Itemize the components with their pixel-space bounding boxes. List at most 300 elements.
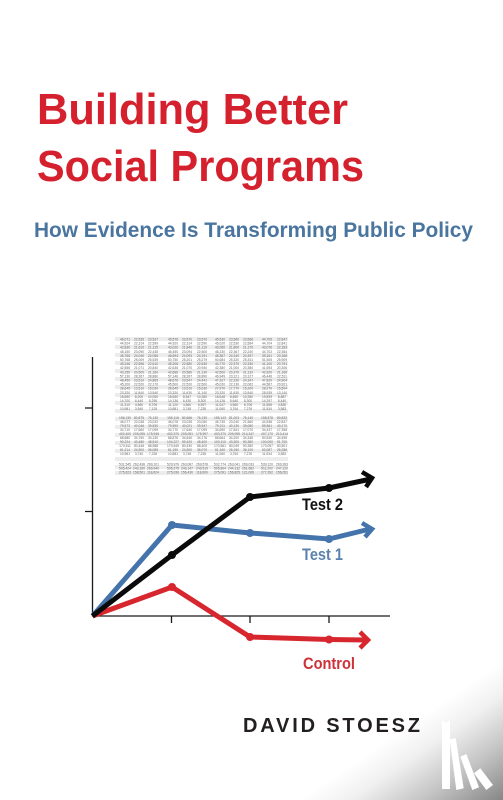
title: Building Better [37,85,348,134]
data table: 79,211 [215,424,225,428]
data table: 263,087 [181,462,193,466]
data table: 48,387 [215,354,225,358]
data table: 20,840 [148,366,158,370]
data table: 11,630 [229,391,239,395]
data table: 11,120 [168,403,178,407]
data table: 22,370 [229,362,239,366]
data table: 3,745 [183,452,191,456]
data table: 36,070 [197,448,207,452]
title [37,85,364,191]
data table: 39,080 [243,424,253,428]
data table: 28,645 [120,387,130,391]
data table: 81,003 [229,416,239,420]
data table: 25,201 [182,358,192,362]
data table: 22,354 [277,350,287,354]
data table: 23,570 [182,338,192,342]
data table: 24,347 [243,378,253,382]
data table: 22,599 [148,342,158,346]
data table: 23,032 [148,420,158,424]
data table: 45,020 [215,342,225,346]
data table: 15,200 [243,387,253,391]
data table: 214,347 [242,432,254,436]
data table: 46,077 [120,420,130,424]
data table: 22,183 [277,346,287,350]
data table: 210,414 [276,432,288,436]
data table: 243,147 [181,466,193,470]
data table: 21,170 [243,346,253,350]
data table: 11,840 [134,391,144,395]
data table: 61,214 [120,448,130,452]
data table: 21,132 [243,370,253,374]
data table: 46,071 [120,338,130,342]
data table: 22,841 [277,342,287,346]
data table: 34,690 [215,428,225,432]
data table: 22,847 [277,420,287,424]
data table: 48,510 [148,440,158,444]
data table: 23,094 [182,350,192,354]
data table: 42,380 [215,366,225,370]
data table: 24,441 [197,378,207,382]
data table: 44,770 [215,362,225,366]
data table: 23,537 [148,338,158,342]
data table: 51,700 [277,440,287,444]
data table: 80,446 [134,444,144,448]
data table: 158,501 [133,470,145,474]
data table: 25,341 [243,358,253,362]
data table: 8,300 [198,399,206,403]
data table: 22,580 [182,362,192,366]
data table: 275,036 [167,470,179,474]
data table: 24,240 [229,354,239,358]
data table: 25,539 [148,358,158,362]
data table: 531,545 [119,462,131,466]
data table: 59,561 [262,424,272,428]
data table: 90,380 [243,444,253,448]
data table: 23,090 [134,350,144,354]
data table: 22,535 [134,338,144,342]
data table: 5,640 [230,399,238,403]
data table: 22,062 [243,383,253,387]
data table: 43,076 [262,346,272,350]
data table: 22,500 [197,383,207,387]
data table: 20,306 [277,366,287,370]
data table: 23,240 [229,420,239,424]
data table: 22,038 [134,420,144,424]
data table: 532,774 [214,462,226,466]
data table: 7,235 [149,452,157,456]
data table: 80,666 [182,416,192,420]
data table: 263,041 [228,462,240,466]
data table: 50,684 [215,358,225,362]
data table: 8,547 [183,395,191,399]
data table: 18,650 [120,395,130,399]
data table: 21,000 [229,366,239,370]
data table: 100,110 [214,440,226,444]
data table: 46,949 [215,374,225,378]
data table: 45,020 [215,383,225,387]
data table: 6,597 [198,403,206,407]
data table: 14,136 [168,399,178,403]
data table: 42,556 [120,366,130,370]
data table: 15,504 [277,387,287,391]
data table: 25,009 [134,358,144,362]
data table: 42,830 [120,346,130,350]
data table: 42,500 [215,370,225,374]
data table: 80,832 [277,416,287,420]
data table: 24,056 [148,354,158,358]
data table: 170,097 [261,444,273,448]
data table: 244,132 [228,466,240,470]
data table: 63,087 [262,448,272,452]
data table: 121,006 [242,470,254,474]
data table: 90,224 [120,440,130,444]
data table: 23,320 [215,391,225,395]
data table: 13,540 [243,391,253,395]
data table: 22,367 [229,350,239,354]
data table: 209,055 [228,432,240,436]
data table: 34,346 [243,436,253,440]
data table: 47,820 [262,378,272,382]
data table: 79,573 [120,424,130,428]
data table: 41,693 [262,366,272,370]
data table: 17,841 [229,428,239,432]
data table: 13,510 [134,387,144,391]
data table: 118,624 [147,470,159,474]
data table: 403,370 [214,432,226,436]
data table: 3,764 [230,407,238,411]
data table: 155,143 [214,416,226,420]
data table: 13,540 [148,391,158,395]
data table: 24,040 [134,354,144,358]
data table: 88,400 [197,444,207,448]
data table: 17,099 [148,428,158,432]
data table: 21,166 [277,370,287,374]
data table: 45,500 [168,383,178,387]
data table: 407,170 [261,432,273,436]
data table: 39,530 [148,424,158,428]
data table: 46,766 [120,354,130,358]
data table: 41,100 [262,362,272,366]
data table: 11,140 [197,391,207,395]
data table: 34,770 [168,428,178,432]
data table: 21,071 [134,366,144,370]
data table: 269,578 [196,462,208,466]
data table: 17,070 [243,428,253,432]
data table: 4,560 [135,403,143,407]
data table: 44,705 [262,338,272,342]
data table: 22,520 [182,383,192,387]
data table: 28,880 [148,374,158,378]
data table: 155,116 [167,416,179,420]
data table: 34,496 [277,436,287,440]
data table: 46,450 [168,350,178,354]
data table: 34,437 [262,428,272,432]
data table: 22,500 [197,350,207,354]
data table: 22,445 [148,350,158,354]
data table: 17,640 [182,428,192,432]
data table: 11,630 [182,391,192,395]
data table: 21,560 [243,420,253,424]
data table: 24,500 [134,448,144,452]
data table: 6,705 [149,403,157,407]
data table: 21,160 [148,370,158,374]
data table: 20,166 [277,354,287,358]
data table: 8,650 [230,395,238,399]
data table: 209,055 [133,432,145,436]
data table: 61,340 [215,448,225,452]
data table: 4,560 [183,403,191,407]
data table: 28,645 [168,387,178,391]
data table: 175,997 [196,432,208,436]
data table: 22,511 [277,374,287,378]
data table: 23,121 [229,374,239,378]
data table: 88,988 [148,444,158,448]
data table: 17,660 [134,428,144,432]
data table: 275,091 [214,470,226,474]
data table: 68,664 [215,436,225,440]
data table: 21,110 [197,346,207,350]
data table: 158,578 [261,416,273,420]
data table: 24,865 [148,378,158,382]
data table: 13,140 [277,391,287,395]
data table: 46,150 [120,350,130,354]
data table: 402,400 [119,432,131,436]
data table: 8,887 [278,395,286,399]
data table: 22,520 [134,383,144,387]
data table: 10,881 [168,407,178,411]
data table: 7,125 [149,407,157,411]
data table: 46,078 [168,420,178,424]
data table: 46,446 [262,374,272,378]
label: control: Control [303,654,355,673]
data table: 24,191 [197,354,207,358]
data table: 269,101 [147,462,159,466]
data table: 25,909 [277,358,287,362]
data table: 19,839 [262,395,272,399]
data table: 45,206 [168,362,178,366]
data table: 23,566 [243,338,253,342]
data table: 24,397 [243,354,253,358]
data table: 44,538 [262,420,272,424]
data table: 40,130 [229,424,239,428]
data table: 25,279 [197,358,207,362]
data table: 26,150 [229,448,239,452]
data table: 50,380 [243,440,253,444]
data table: 10,280 [243,395,253,399]
chart axes [85,357,390,623]
data table: 36,085 [148,448,158,452]
data table: 15,030 [148,387,158,391]
data table: 104,227 [167,440,179,444]
data table: 22,610 [148,362,158,366]
data table: 43,150 [120,370,130,374]
data table: 4,830 [278,403,286,407]
line: test 2 [92,472,372,616]
data table: 20,940 [197,366,207,370]
data table: 26,286 [277,448,287,452]
data table: 11,060 [215,452,225,456]
data table: 209,051 [181,432,193,436]
data table: 43,300 [229,440,239,444]
data table: 44,587 [262,383,272,387]
data table: 6,430 [183,399,191,403]
data table: 14,126 [215,399,225,403]
data table: 48,676 [168,378,178,382]
data table: 539,120 [261,462,273,466]
data table: 6,440 [135,399,143,403]
data table: 45,530 [215,338,225,342]
data table: 20,791 [277,362,287,366]
data table: 22,314 [134,342,144,346]
data table: 76,130 [197,416,207,420]
data table: 51,505 [262,358,272,362]
data table: 261,682 [242,466,254,470]
data table: 76,130 [148,416,158,420]
data table: 44,920 [168,342,178,346]
label: test 2: Test 2 [302,495,343,514]
data table: 118,600 [196,470,208,474]
data table: 80,501 [277,444,287,448]
data table: 17,099 [197,428,207,432]
data table: 22,596 [134,362,144,366]
line: control [92,583,368,648]
data table: 22,590 [197,342,207,346]
data table: 25,320 [229,358,239,362]
data table: 40,046 [134,424,144,428]
label: test 1: Test 1 [302,545,343,564]
data table: 22,314 [182,342,192,346]
data table: 23,547 [182,378,192,382]
data table: 7,276 [244,407,252,411]
data table: 48,400 [197,440,207,444]
data table: 28,267 [182,374,192,378]
data table: 39,161 [262,354,272,358]
data table: 28,890 [197,374,207,378]
data table: 48,450 [120,378,130,382]
data table: 243,160 [133,466,145,470]
data table: 23,510 [134,378,144,382]
data table: 23,320 [168,391,178,395]
data table: 43,020 [168,346,178,350]
data table: 156,825 [228,470,240,474]
data table: 3,540 [135,407,143,411]
data table: 156,130 [119,416,131,420]
data table: 170,511 [119,444,131,448]
data table: 505,424 [119,466,131,470]
data table: 59,420 [182,440,192,444]
line: test 1 [92,521,372,616]
data table: 505,804 [214,466,226,470]
data table: 42,636 [168,366,178,370]
data table: 175,945 [147,432,159,436]
data table: 269,033 [242,462,254,466]
data table: 8,300 [244,399,252,403]
data table: 68,876 [168,436,178,440]
data table: 44,702 [262,350,272,354]
line chart [85,357,390,673]
data table: 170,561 [214,444,226,448]
data table: 50,768 [120,358,130,362]
data table: 402,370 [167,432,179,436]
data table: 28,267 [134,374,144,378]
data table: 45,576 [168,338,178,342]
data table: 40,021 [182,424,192,428]
data table: 275,623 [119,470,131,474]
data table: 8,295 [149,399,157,403]
data table: 3,583 [278,407,286,411]
data table: 10,050 [148,395,158,399]
data table [115,337,288,475]
data table: 10,881 [168,452,178,456]
data table: 68,680 [120,436,130,440]
data table: 42,920 [262,370,272,374]
data table: 17,770 [229,387,239,391]
data table: 505,275 [167,466,179,470]
data table: 529,979 [167,462,179,466]
data table: 269,283 [276,462,288,466]
data table: 11,534 [262,452,272,456]
data table: 80,049 [229,444,239,448]
data table: 8,200 [135,395,143,399]
data table: 20,500 [134,370,144,374]
data table: 4,560 [230,403,238,407]
data table: 249,519 [196,466,208,470]
data table: 22,130 [229,383,239,387]
data table: 34,760 [134,436,144,440]
data table: 11,534 [262,407,272,411]
data table: 18,650 [168,395,178,399]
data table: 24,904 [277,378,287,382]
data table: 11,060 [215,407,225,411]
data table: 10,981 [120,452,130,456]
data table: 156,051 [276,470,288,474]
data table: 24,500 [182,448,192,452]
data table: 45,246 [120,362,130,366]
data table: 50,750 [168,358,178,362]
data table: 46,735 [215,420,225,424]
data table: 21,840 [182,346,192,350]
data table: 23,035 [182,420,192,424]
subtitle: How Evidence Is Transforming Public Policy [34,219,473,242]
title: Social Programs [37,142,364,191]
data table: 34,710 [120,428,130,432]
data table: 100,000 [261,440,273,444]
data table: 20,580 [182,370,192,374]
data table: 76,140 [243,416,253,420]
data table: 80,875 [134,416,144,420]
data table: 17,358 [277,428,287,432]
data table: 3,583 [278,452,286,456]
data table: 10,981 [120,407,130,411]
data table: 22,630 [197,362,207,366]
data table: 27,970 [215,387,225,391]
data table: 57,130 [120,374,130,378]
data table: 6,705 [244,403,252,407]
data table: 13,510 [182,387,192,391]
data table: 11,558 [262,403,272,407]
data table: 23,127 [243,374,253,378]
data table: 22,330 [243,362,253,366]
data table: 3,764 [230,452,238,456]
data table: 511,202 [261,466,273,470]
data table: 21,130 [197,370,207,374]
data table: 269,940 [147,466,159,470]
data table: 10,280 [197,395,207,399]
data table: 262,438 [133,462,145,466]
data table: 43,480 [134,440,144,444]
data table: 23,560 [229,338,239,342]
data table: 46,230 [215,350,225,354]
